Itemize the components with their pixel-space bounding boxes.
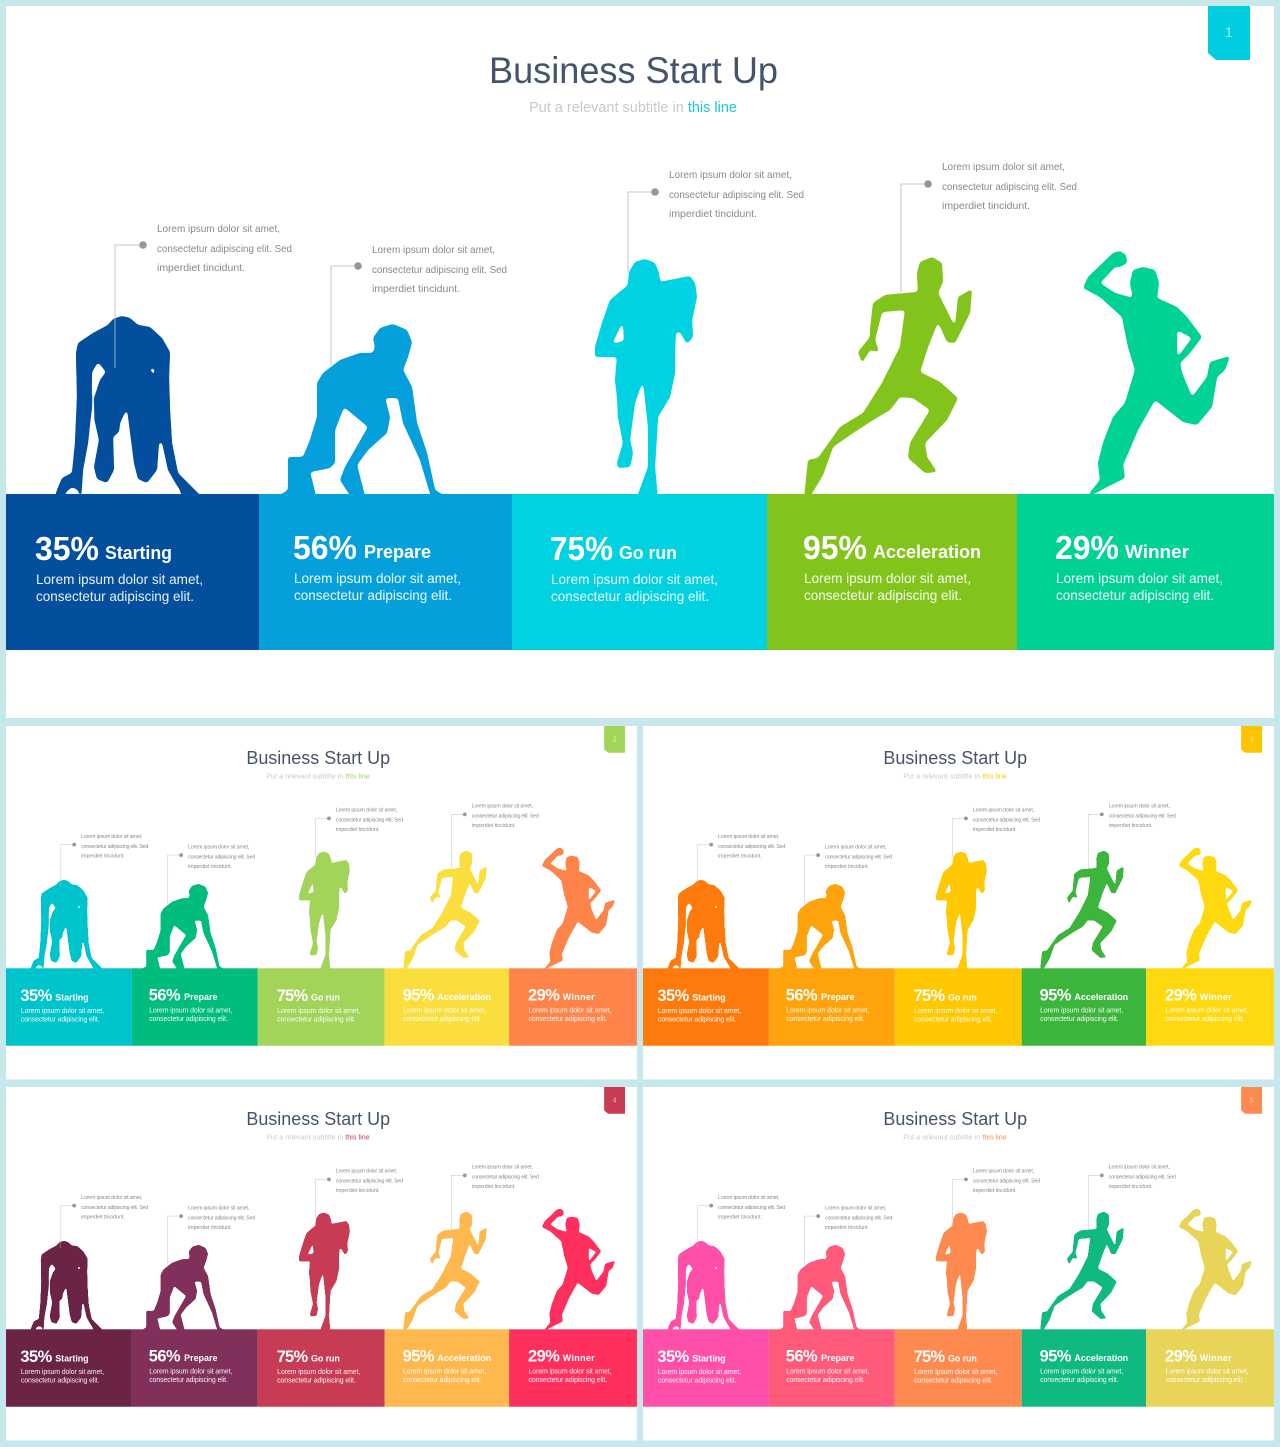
slide 3 bands: Lorem ipsum dolor sit amet, (786, 1007, 869, 1014)
callout 2: Lorem ipsum dolor sit amet, (372, 244, 495, 256)
slide 5 bands: Prepare (821, 1353, 854, 1363)
slide 2 bands: Go run (311, 993, 340, 1003)
slide 2 bands: consectetur adipiscing elit. (21, 1016, 100, 1023)
band: 75% go run: Go run (619, 543, 677, 563)
slide 5 bands: consectetur adipiscing elit. (1165, 1377, 1244, 1384)
slide 4 bands: consectetur adipiscing elit. (528, 1377, 607, 1384)
slide 3 bands: Lorem ipsum dolor sit amet, (1165, 1007, 1249, 1014)
band: 29% winner (1017, 494, 1274, 650)
slide 2 callouts: Lorem ipsum dolor sit amet, (336, 807, 397, 813)
slide 2 callouts: consectetur adipiscing elit. Sed (188, 855, 255, 861)
slide 2 bands: 95% (403, 987, 435, 1005)
slide 5 callouts: consectetur adipiscing elit. Sed (1109, 1174, 1176, 1180)
slide 5 callouts: imperdiet tincidunt. (1109, 1184, 1153, 1190)
slide 4 bands: consectetur adipiscing elit. (21, 1377, 100, 1384)
slide 3 callouts: imperdiet tincidunt. (718, 854, 762, 860)
slide 4 bands: Starting (55, 1354, 89, 1364)
slide 4 callouts: imperdiet tincidunt. (336, 1188, 380, 1194)
slide 2 bands: Starting (55, 993, 89, 1003)
slide 4 bands: Lorem ipsum dolor sit amet, (149, 1368, 232, 1375)
slide 3 bands: 29% (1165, 987, 1197, 1005)
panel: main slide 1 (6, 6, 1274, 718)
slide 2 title: Business Start Up (246, 747, 390, 768)
slide 5 callouts: consectetur adipiscing elit. Sed (973, 1178, 1040, 1184)
slide 5 figures (667, 1209, 1252, 1332)
slide 5 bands: Lorem ipsum dolor sit amet, (914, 1369, 997, 1376)
subtitle: Put a relevant subtitle in this line (529, 99, 737, 116)
callout 4 (901, 161, 1077, 292)
band: 95% acceleration: Acceleration (873, 542, 981, 562)
slide 3 bands: consectetur adipiscing elit. (914, 1016, 993, 1023)
slide 3 callouts: Lorem ipsum dolor sit amet, (718, 834, 779, 840)
slide 5 bands: 29% (1165, 1348, 1197, 1366)
slide 2 bands: 35% (20, 987, 53, 1005)
slide 3 bands: 75% (914, 987, 945, 1005)
slide 2 tab (604, 726, 625, 753)
slide 3 bands: Prepare (821, 992, 854, 1002)
slide 5 bands: consectetur adipiscing elit. (1040, 1377, 1119, 1384)
band: 75% go run: 75% (550, 530, 613, 567)
band: 95% acceleration: consectetur adipiscing elit. (804, 587, 962, 603)
slide 4 bands: consectetur adipiscing elit. (403, 1377, 482, 1384)
slide 5 callouts: imperdiet tincidunt. (825, 1225, 869, 1231)
slide 4 callouts: Lorem ipsum dolor sit amet, (81, 1195, 142, 1201)
band: 95% acceleration: 95% (803, 529, 867, 566)
band: 75% go run: consectetur adipiscing elit. (551, 588, 709, 604)
slide 5 bands: 95% (1040, 1348, 1072, 1366)
slide 4 bands: 75% (277, 1348, 308, 1366)
band: 75% go run (512, 494, 767, 650)
band: 35% starting: Lorem ipsum dolor sit amet, (36, 571, 203, 587)
callout 2: imperdiet tincidunt. (372, 283, 460, 295)
slide 4 bands: 35% (20, 1348, 53, 1366)
slide 4 bands: 29% (528, 1348, 560, 1366)
slide 3 bands: consectetur adipiscing elit. (786, 1016, 865, 1023)
slide 4 callouts: imperdiet tincidunt. (81, 1215, 125, 1221)
slide 3 bands: 56% (786, 987, 818, 1005)
band: 35% starting: consectetur adipiscing elit. (36, 588, 194, 604)
slide 5 callouts (697, 1164, 1176, 1265)
slide 3 bands: Lorem ipsum dolor sit amet, (1040, 1007, 1123, 1014)
slide 2 bands: 75% (277, 987, 308, 1005)
slide 2 bands: consectetur adipiscing elit. (528, 1016, 607, 1023)
slide 4 bands: Winner (563, 1353, 595, 1363)
callout 1 (115, 223, 292, 368)
slide 5 bands (643, 1329, 1274, 1407)
slide 4 callouts (60, 1164, 539, 1265)
slide 4 bands: Lorem ipsum dolor sit amet, (528, 1368, 612, 1375)
slide 2 callouts: Lorem ipsum dolor sit amet, (472, 803, 533, 809)
slide 2 callouts: imperdiet tincidunt. (472, 823, 516, 829)
callout 1: Lorem ipsum dolor sit amet, (157, 223, 280, 235)
slide 2 bands: Lorem ipsum dolor sit amet, (528, 1007, 612, 1014)
slide 2 bands: Lorem ipsum dolor sit amet, (21, 1008, 104, 1015)
band: 35% starting: Starting (105, 543, 172, 563)
slide 2 tab: 2 (613, 736, 617, 743)
band: 35% starting: 35% (35, 530, 99, 567)
slide 5 bands: Acceleration (1074, 1353, 1128, 1363)
callout 4: imperdiet tincidunt. (942, 200, 1030, 212)
slide 5 callouts: Lorem ipsum dolor sit amet, (718, 1195, 779, 1201)
slide 4 bands: Lorem ipsum dolor sit amet, (277, 1369, 360, 1376)
slide 4 subtitle: Put a relevant subtitle in this line (266, 1133, 370, 1142)
slide 3 callouts: imperdiet tincidunt. (825, 864, 869, 870)
slide 5 callouts: consectetur adipiscing elit. Sed (718, 1205, 785, 1211)
figure: prepare (272, 324, 452, 500)
slide 4 callouts: Lorem ipsum dolor sit amet, (336, 1168, 397, 1174)
figure: winner (1083, 251, 1230, 495)
slide 4 title: Business Start Up (246, 1108, 390, 1129)
title: Business Start Up (489, 50, 778, 91)
slide 4 callouts: consectetur adipiscing elit. Sed (472, 1174, 539, 1180)
slide 2 callouts: consectetur adipiscing elit. Sed (472, 813, 539, 819)
callout 2: consectetur adipiscing elit. Sed (372, 264, 507, 276)
slide 5 bands: Lorem ipsum dolor sit amet, (786, 1368, 869, 1375)
slide 4 callouts: imperdiet tincidunt. (472, 1184, 516, 1190)
slide 5 bands: 56% (786, 1348, 818, 1366)
callout 3: imperdiet tincidunt. (669, 208, 757, 220)
band: 29% winner: Winner (1125, 542, 1189, 562)
slide 4 callouts: imperdiet tincidunt. (188, 1225, 232, 1231)
slide 4 bands: 56% (149, 1348, 181, 1366)
slide 3 bands (643, 968, 1274, 1046)
slide 2 callouts: consectetur adipiscing elit. Sed (81, 844, 148, 850)
slide 2 bands: consectetur adipiscing elit. (403, 1016, 482, 1023)
panel: slide 5 (643, 1087, 1274, 1441)
slide 4 figures (30, 1209, 615, 1332)
slide 5 title: Business Start Up (883, 1108, 1027, 1129)
slide 3 bands: Lorem ipsum dolor sit amet, (914, 1008, 997, 1015)
page tab: 1 (1225, 24, 1233, 40)
callout 3: Lorem ipsum dolor sit amet, (669, 169, 792, 181)
slide 2 bands: 56% (149, 987, 181, 1005)
figure: go run (595, 259, 697, 500)
slide 5 bands: Go run (948, 1354, 977, 1364)
slide 5 callouts: imperdiet tincidunt. (718, 1215, 762, 1221)
slide 2 bands: Prepare (184, 992, 217, 1002)
callout 4: consectetur adipiscing elit. Sed (942, 181, 1077, 193)
slide 4 bands: Go run (311, 1354, 340, 1364)
band: 95% acceleration (767, 494, 1017, 650)
slide 5 bands: consectetur adipiscing elit. (658, 1377, 737, 1384)
slide 5 callouts: Lorem ipsum dolor sit amet, (1109, 1164, 1170, 1170)
slide 3 tab: 3 (1250, 736, 1254, 743)
slide 4 bands: Lorem ipsum dolor sit amet, (403, 1368, 486, 1375)
band: 56% prepare: Prepare (364, 542, 431, 562)
slide 2 bands: Winner (563, 992, 595, 1002)
slide 4 tab: 4 (613, 1097, 617, 1104)
slide 3 callouts: consectetur adipiscing elit. Sed (718, 844, 785, 850)
slide 3 bands: Acceleration (1074, 992, 1128, 1002)
slide 3 callouts: consectetur adipiscing elit. Sed (825, 855, 892, 861)
band: 56% prepare: 56% (293, 529, 357, 566)
slide 4 bands: Lorem ipsum dolor sit amet, (21, 1369, 104, 1376)
slide 5 bands: Lorem ipsum dolor sit amet, (658, 1369, 741, 1376)
slide 3 bands: Winner (1200, 992, 1232, 1002)
panel: slide 4 (6, 1087, 637, 1441)
figure: acceleration (804, 257, 972, 500)
band: 29% winner: Lorem ipsum dolor sit amet, (1056, 570, 1223, 586)
slide 2 callouts: Lorem ipsum dolor sit amet, (81, 834, 142, 840)
slide 2 callouts: imperdiet tincidunt. (336, 827, 380, 833)
slide 2 bands: 29% (528, 987, 560, 1005)
slide 2 figures (30, 848, 615, 971)
slide 3 bands: consectetur adipiscing elit. (1040, 1016, 1119, 1023)
slide 2 callouts (60, 803, 539, 904)
slide 3 bands: consectetur adipiscing elit. (1165, 1016, 1244, 1023)
slide 3 callouts: Lorem ipsum dolor sit amet, (1109, 803, 1170, 809)
slide 2 callouts: Lorem ipsum dolor sit amet, (188, 845, 249, 851)
slide 4 callouts: consectetur adipiscing elit. Sed (81, 1205, 148, 1211)
slide 5 subtitle: Put a relevant subtitle in this line (903, 1133, 1007, 1142)
slide 4 callouts: Lorem ipsum dolor sit amet, (472, 1164, 533, 1170)
band: 35% starting (6, 494, 259, 650)
slide 5 bands: consectetur adipiscing elit. (914, 1377, 993, 1384)
slide 3 bands: 35% (657, 987, 690, 1005)
panel: slide 2 (6, 726, 637, 1080)
slide 3 bands: Go run (948, 993, 977, 1003)
slide 5 tab (1241, 1087, 1262, 1114)
slide 4 bands: Acceleration (437, 1353, 491, 1363)
slide 3 tab (1241, 726, 1262, 753)
slide 4 callouts: consectetur adipiscing elit. Sed (336, 1178, 403, 1184)
slide 4 bands: consectetur adipiscing elit. (277, 1377, 356, 1384)
band: 29% winner: 29% (1055, 529, 1119, 566)
panel: slide 3 (643, 726, 1274, 1080)
band: 56% prepare (259, 494, 512, 650)
slide 5 bands: Winner (1200, 1353, 1232, 1363)
slide 2 bands (6, 968, 637, 1046)
band: 56% prepare: Lorem ipsum dolor sit amet, (294, 570, 461, 586)
callout 1: consectetur adipiscing elit. Sed (157, 243, 292, 255)
slide 2 bands: Lorem ipsum dolor sit amet, (149, 1007, 232, 1014)
slide 3 callouts: imperdiet tincidunt. (973, 827, 1017, 833)
slide 2 bands: consectetur adipiscing elit. (149, 1016, 228, 1023)
callout 3 (628, 169, 804, 272)
slide 3 figures (667, 848, 1252, 971)
slide 5 bands: Starting (692, 1354, 726, 1364)
figure: starting (54, 316, 205, 500)
slide 2 bands: consectetur adipiscing elit. (277, 1016, 356, 1023)
slide 5 callouts: imperdiet tincidunt. (973, 1188, 1017, 1194)
band: 56% prepare: consectetur adipiscing elit. (294, 587, 452, 603)
band: 75% go run: Lorem ipsum dolor sit amet, (551, 571, 718, 587)
slide 3 bands: consectetur adipiscing elit. (658, 1016, 737, 1023)
slide 3 subtitle: Put a relevant subtitle in this line (903, 772, 1007, 781)
slide 5 tab: 5 (1250, 1097, 1254, 1104)
callout 4: Lorem ipsum dolor sit amet, (942, 161, 1065, 173)
slide 3 bands: Starting (692, 993, 726, 1003)
slide 5 bands: consectetur adipiscing elit. (786, 1377, 865, 1384)
slide 4 bands: Prepare (184, 1353, 217, 1363)
slide 3 callouts: imperdiet tincidunt. (1109, 823, 1153, 829)
slide 5 bands: 35% (657, 1348, 690, 1366)
slide 2 callouts: imperdiet tincidunt. (188, 864, 232, 870)
slide 3 bands: 95% (1040, 987, 1072, 1005)
slide 5 callouts: consectetur adipiscing elit. Sed (825, 1216, 892, 1222)
slide 4 tab (604, 1087, 625, 1114)
slide 2 callouts: consectetur adipiscing elit. Sed (336, 817, 403, 823)
slide 3 callouts: consectetur adipiscing elit. Sed (1109, 813, 1176, 819)
callout 2 (331, 244, 507, 365)
slide 2 bands: Lorem ipsum dolor sit amet, (277, 1008, 360, 1015)
callout 3: consectetur adipiscing elit. Sed (669, 189, 804, 201)
page tab (1208, 6, 1250, 60)
band: 95% acceleration: Lorem ipsum dolor sit amet, (804, 570, 971, 586)
slide 3 title: Business Start Up (883, 747, 1027, 768)
slide 2 callouts: imperdiet tincidunt. (81, 854, 125, 860)
slide 4 callouts: Lorem ipsum dolor sit amet, (188, 1206, 249, 1212)
slide 3 callouts (697, 803, 1176, 904)
slide 5 callouts: Lorem ipsum dolor sit amet, (973, 1168, 1034, 1174)
band: 29% winner: consectetur adipiscing elit. (1056, 587, 1214, 603)
callout 1: imperdiet tincidunt. (157, 262, 245, 274)
slide 5 bands: 75% (914, 1348, 945, 1366)
slide 5 bands: Lorem ipsum dolor sit amet, (1040, 1368, 1123, 1375)
slide 4 callouts: consectetur adipiscing elit. Sed (188, 1216, 255, 1222)
slide 5 callouts: Lorem ipsum dolor sit amet, (825, 1206, 886, 1212)
slide 4 bands: consectetur adipiscing elit. (149, 1377, 228, 1384)
slide 2 bands: Acceleration (437, 992, 491, 1002)
slide 3 callouts: consectetur adipiscing elit. Sed (973, 817, 1040, 823)
slide 3 bands: Lorem ipsum dolor sit amet, (658, 1008, 741, 1015)
slide 5 bands: Lorem ipsum dolor sit amet, (1165, 1368, 1249, 1375)
slide 2 subtitle: Put a relevant subtitle in this line (266, 772, 370, 781)
slide 4 bands: 95% (403, 1348, 435, 1366)
slide 3 callouts: Lorem ipsum dolor sit amet, (973, 807, 1034, 813)
slide 3 callouts: Lorem ipsum dolor sit amet, (825, 845, 886, 851)
slide 2 bands: Lorem ipsum dolor sit amet, (403, 1007, 486, 1014)
slide 4 bands (6, 1329, 637, 1407)
